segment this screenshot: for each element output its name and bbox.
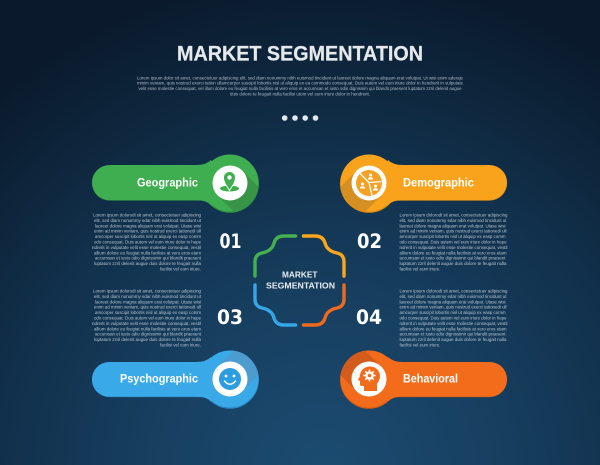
icon: segmented people chart xyxy=(356,170,382,196)
text block: demographic: laoreet dolore magna aliquam erat volutpat. Utase wisi xyxy=(400,223,506,229)
text block: geographic: allium dolore eu feugiat nulla facilisis at vero eros etam xyxy=(94,250,201,256)
text block: psychographic: ndrerit in vulputate velit esse molestie consequat, vestil xyxy=(92,321,201,327)
text block: behavioral: luptatum zzril delenit augue duis dolore te feugait nulla xyxy=(400,337,507,343)
number 04: 04 xyxy=(356,306,382,329)
panel: psychographic header xyxy=(92,350,259,409)
icon: smiley face xyxy=(219,368,241,390)
panel: psychographic header: Psychographic xyxy=(120,374,199,386)
central label: SEGMENTATION xyxy=(266,280,335,290)
number 01: 01 xyxy=(220,230,242,253)
text block: demographic: allium dolore eu feugiat nulla facilisis at vero eros etam xyxy=(400,250,507,256)
text block: psychographic: laoreet dolore magna aliquam erat volutpat. Utase wisi xyxy=(95,299,201,305)
number 03: 03 xyxy=(217,306,243,329)
text block: geographic: amcorper suscipit lobortis nisl ut aliquip ex easp comm xyxy=(95,234,201,240)
panel: demographic header: Demographic xyxy=(403,178,475,190)
text block: demographic: facilisi vel eum iriure. xyxy=(400,266,440,272)
text block: demographic: amcorper suscipit lobortis nisl ut aliquip ex easp comm xyxy=(400,234,506,240)
number 02: 02 xyxy=(357,230,382,253)
intro text block: minim veniam, quis nostrud exerci tation ullamcorper suscipit lobortis nisl ut aliquip ex ea commodo consequat. Duis autem vel eum iriure dolor in hendrerit in vulputate xyxy=(137,81,463,87)
text block: geographic: laoreet dolore magna aliquam erat volutpat. Utase wisi xyxy=(95,223,201,229)
text block: behavioral: facilisi vel eum iriure. xyxy=(400,342,440,348)
text block: behavioral: enim ad minim veniam, quis nostrud exerci tationedi ull xyxy=(400,305,506,311)
intro text block: duis dolore te feugait nulla facilisi utom vel eum iriure dolor in hendrerit. xyxy=(230,91,370,97)
intro text block: velit esse molestie consequat, vel illum dolore eu feugiat nulla facilisis at vero eros et accumsan et iusto odio dignissim qui blandit praesent luptatum zzril delenit augue xyxy=(138,86,462,92)
text block: demographic: enim ad minim veniam, quis nostrud exerci tationedi ull xyxy=(400,229,506,235)
text block: geographic: odo consequat. Duis autem vel eum iriure dolor in hepe xyxy=(94,240,201,246)
text block: behavioral: accumsan et iusto odio dignissimir qui blandit praesent xyxy=(400,332,506,338)
text block: demographic: elit, sed diam nonummy edar nibh euismod tincidunt ut xyxy=(400,218,507,224)
text block: psychographic: Lorem ipsum dolorodi sit amet, consectetuer adipiscing xyxy=(93,288,201,294)
text block: geographic: ndrerit in vulputate velit esse molestie consequat, vestil xyxy=(92,245,201,251)
central label xyxy=(266,270,335,290)
text block: behavioral: amcorper suscipit lobortis nisl ut aliquip ex easp comm xyxy=(400,310,506,316)
text block: demographic: luptatum zzril delenit augue duis dolore te feugait nulla xyxy=(400,261,507,267)
text block: psychographic xyxy=(92,288,202,348)
text block: behavioral: allium dolore eu feugiat nulla facilisis at vero eros etam xyxy=(400,326,507,332)
text block: behavioral: elit, sed diam nonummy edar nibh euismod tincidunt ut xyxy=(400,294,507,300)
panel: geographic header: Geographic xyxy=(137,178,199,190)
text block: demographic: accumsan et iusto odio dignissimir qui blandit praesent xyxy=(400,256,506,262)
text block: demographic: Lorem ipsum dolorodi sit amet, consectetuer adipiscing xyxy=(400,212,508,218)
text block: geographic: facilisi vel eum iriure. xyxy=(160,266,201,272)
text block: demographic: odo consequat. Duis autem vel eum iriure dolor in hepe xyxy=(400,240,507,246)
text block: geographic: accumsan et iusto odio dignissimir qui blandit praesent xyxy=(95,256,202,262)
central label: MARKET xyxy=(282,270,318,280)
text block: demographic: ndrerit in vulputate velit esse molestie consequat, vestil xyxy=(400,245,508,251)
panel: demographic header xyxy=(340,154,507,213)
intro text block xyxy=(137,75,463,97)
text block: behavioral: Lorem ipsum dolorodi sit amet, consectetuer adipiscing xyxy=(400,288,508,294)
pagination dots xyxy=(282,115,318,121)
text block: psychographic: accumsan et iusto odio dignissimir qui blandit praesent xyxy=(95,332,202,338)
text block: psychographic: allium dolore eu feugiat nulla facilisis at vero eros etam xyxy=(94,326,201,332)
text block: behavioral xyxy=(400,288,508,348)
text block: behavioral: ndrerit in vulputate velit esse molestie consequat, vestil xyxy=(400,321,508,327)
text block: geographic xyxy=(92,212,202,272)
text block: psychographic: amcorper suscipit lobortis nisl ut aliquip ex easp comm xyxy=(95,310,201,316)
icon: head with gear xyxy=(358,366,380,391)
icon: map pin xyxy=(220,172,239,192)
text block: psychographic: luptatum zzril delenit augue duis dolore te feugait nulla xyxy=(94,337,201,343)
text block: psychographic: facilisi vel eum iriure. xyxy=(160,342,201,348)
panel: geographic header xyxy=(92,154,259,213)
text block: psychographic: elit, sed diam nonummy edar nibh euismod tincidunt ut xyxy=(94,294,202,300)
panel: behavioral header: Behavioral xyxy=(403,374,458,386)
text block: behavioral: odo consequat. Duis autem vel eum iriure dolor in hepe xyxy=(400,316,507,322)
text block: geographic: Lorem ipsum dolorodi sit amet, consectetuer adipiscing xyxy=(93,212,201,218)
text block: behavioral: laoreet dolore magna aliquam erat volutpat. Utase wisi xyxy=(400,299,506,305)
text block: geographic: enim ad minim veniam, quis nostrud exerci tationedi ull xyxy=(94,229,201,235)
text block: geographic: luptatum zzril delenit augue duis dolore te feugait nulla xyxy=(94,261,201,267)
text block: demographic xyxy=(400,212,508,272)
title: MARKET SEGMENTATION xyxy=(177,42,423,66)
text block: psychographic: odo consequat. Duis autem vel eum iriure dolor in hepe xyxy=(94,316,201,322)
text block: psychographic: enim ad minim veniam, quis nostrud exerci tationedi ull xyxy=(94,305,201,311)
central octagon ring xyxy=(255,236,344,325)
intro text block: Lorem ipsum dolor sit amet, consectetuer adipiscing elit, sed diam nonummy nibh euismod tincidunt ut laoreet dolore magna aliquam erat volutpat. Ut wisi enim aderaje xyxy=(137,75,463,81)
panel: behavioral header xyxy=(340,350,507,409)
text block: geographic: elit, sed diam nonummy edar nibh euismod tincidunt ut xyxy=(94,218,202,224)
